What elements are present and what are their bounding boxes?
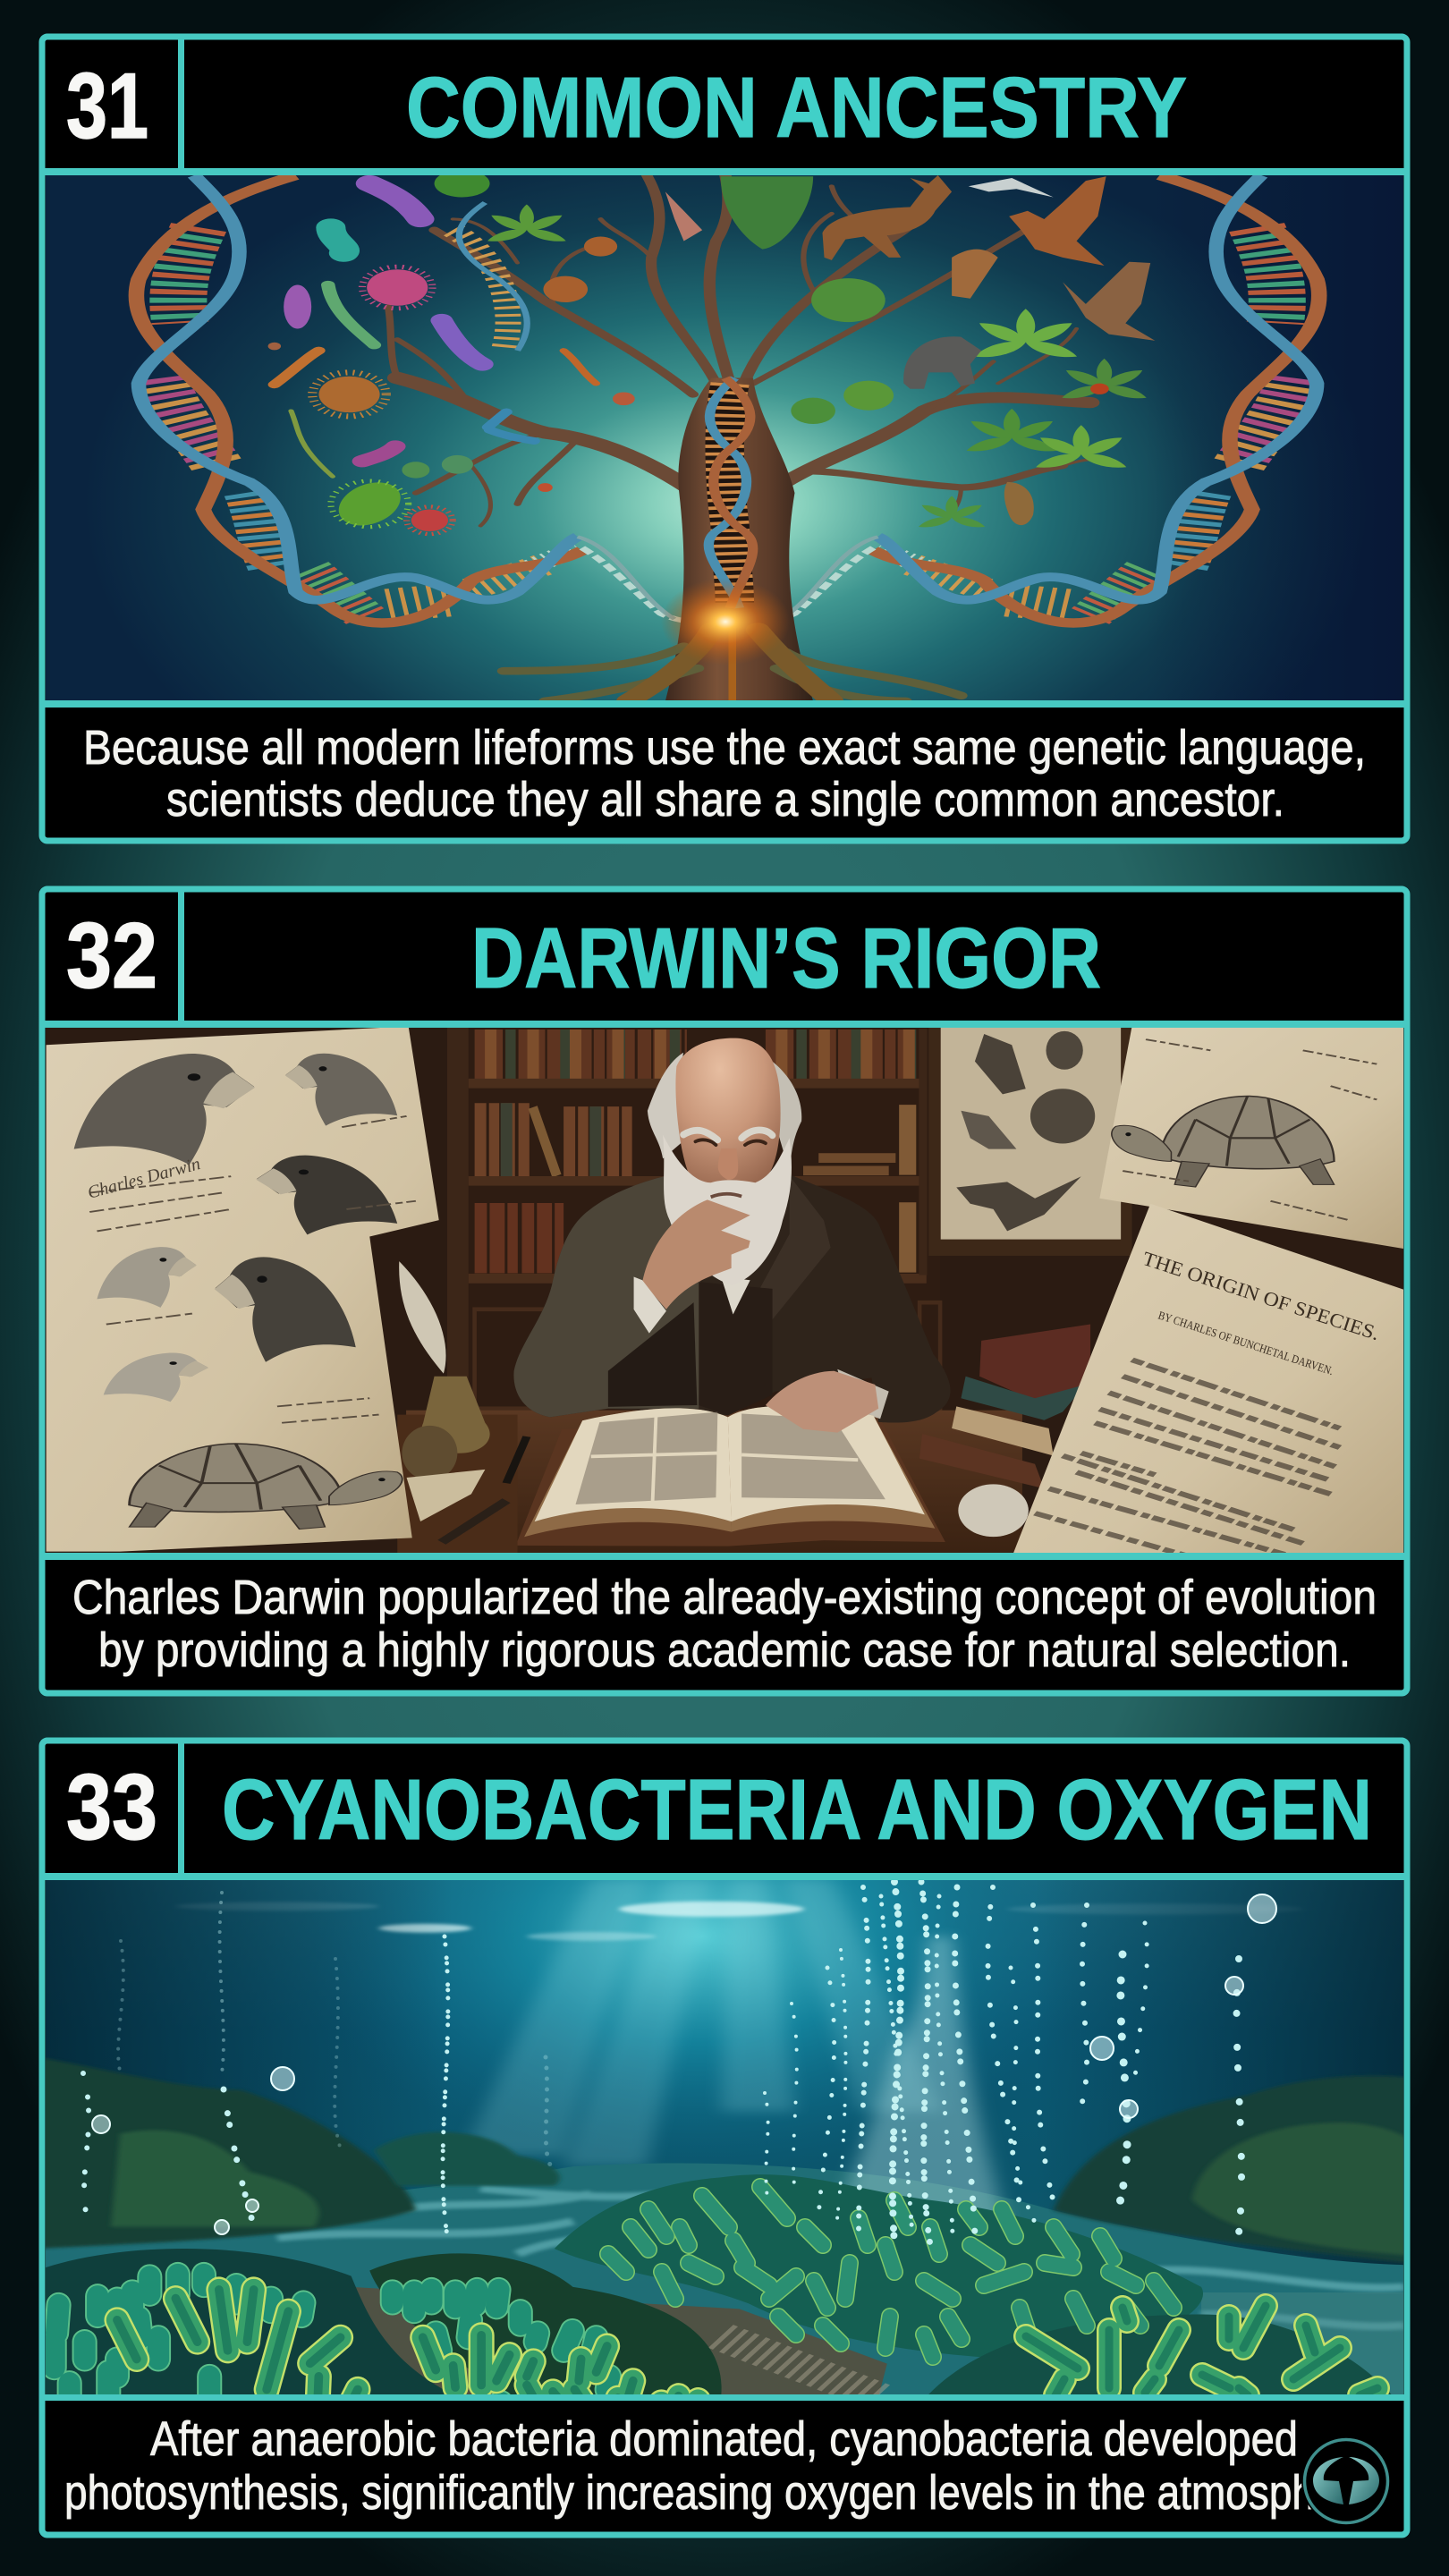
rods left foreground	[55, 2275, 707, 2502]
title: DARWIN’S RIGOR	[471, 911, 1101, 1006]
desk	[406, 1411, 1022, 1554]
large bubbles	[92, 1894, 1276, 2234]
right parchment with tortoise	[1099, 1026, 1414, 1250]
side vignette	[37, 1874, 1423, 2399]
head	[675, 1038, 781, 1194]
illustration: tree of life with DNA	[37, 170, 1423, 707]
book page heading: THE ORIGIN OF SPECIES.	[1140, 1247, 1383, 1344]
caption: After anaerobic bacteria dominated, cyanobacteria developed	[150, 2412, 1298, 2466]
bubble columns	[83, 1882, 1241, 2263]
header and caption dividers	[39, 34, 1410, 708]
Darwin scene	[406, 1025, 1022, 1554]
jacket	[513, 1176, 951, 1423]
central oxygen plume glow	[832, 1936, 1007, 2227]
number 33: 33	[66, 1756, 157, 1860]
tree trunk	[665, 378, 813, 701]
caption	[83, 721, 1366, 826]
DNA helix left	[136, 175, 725, 623]
rods right foreground	[1026, 2306, 1377, 2395]
watermark logo	[1301, 2436, 1391, 2526]
face details	[718, 1148, 738, 1180]
rocky seabed foreground	[352, 2287, 887, 2399]
panel frame	[42, 889, 1407, 1693]
surface ripples	[175, 1902, 1303, 1941]
hair	[648, 1053, 687, 1158]
header and caption dividers	[39, 1738, 1410, 2401]
caption	[72, 1571, 1377, 1677]
beard	[663, 1135, 792, 1285]
waistcoat and shirt	[699, 1282, 773, 1415]
roots	[504, 630, 961, 701]
raised hand	[642, 1199, 750, 1309]
panel 33: cyanobacteria and oxygen	[37, 1738, 1423, 2535]
animals	[665, 175, 1155, 389]
background rock mounds	[37, 2057, 1423, 2265]
illustration: Darwin at desk	[46, 1023, 1414, 1560]
panel 32: Darwin's rigor	[39, 886, 1414, 1693]
glowing origin spark	[664, 580, 786, 662]
rods in centre mound	[608, 2187, 1174, 2357]
DNA helix right	[730, 175, 1319, 623]
caption: scientists deduce they all share a single common ancestor.	[166, 773, 1284, 826]
right hand	[837, 1369, 889, 1419]
framed sketches on wall	[928, 1023, 1132, 1256]
coral mounds foreground	[37, 2249, 462, 2399]
number 32: 32	[66, 904, 157, 1008]
bookcase	[447, 1025, 940, 1415]
left parchment with finch sketches	[47, 1026, 439, 1552]
handwritten note: Charles Darwin	[86, 1154, 202, 1203]
microbes	[275, 183, 596, 477]
stacked books and skull	[919, 1325, 1090, 1537]
tree branches	[388, 175, 1123, 526]
book page byline: BY CHARLES OF BUNCHETAL DARVEN.	[1157, 1309, 1335, 1377]
illustration: underwater oxygen bubbles	[37, 1874, 1423, 2502]
panel frame	[42, 37, 1407, 841]
leaf clusters	[435, 170, 1149, 530]
number 31: 31	[66, 55, 148, 158]
header and caption dividers	[39, 886, 1410, 1560]
panel frame	[42, 1741, 1407, 2535]
inkwell, quill and pens	[397, 1261, 527, 1557]
coral mound centre	[555, 2174, 1203, 2360]
light rays	[462, 1879, 943, 2166]
sky glow	[37, 170, 1423, 707]
water	[37, 1874, 1423, 2399]
sand seabed	[37, 2163, 1423, 2399]
open book	[516, 1422, 945, 1546]
caption	[64, 2412, 1315, 2520]
trunk DNA	[708, 378, 753, 608]
title: COMMON ANCESTRY	[406, 60, 1187, 156]
study wall	[46, 1028, 1403, 1553]
spores	[268, 237, 635, 534]
Origin of Species page	[1012, 1204, 1409, 1560]
panel 31: common ancestry	[37, 34, 1423, 841]
upper branch DNA	[453, 203, 527, 351]
